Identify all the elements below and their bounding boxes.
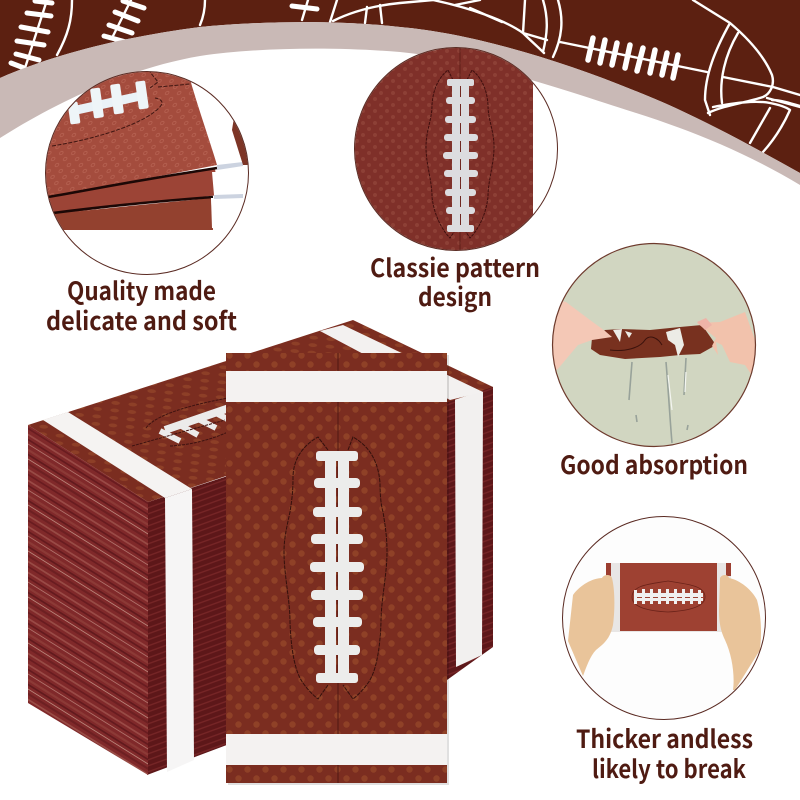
right hand <box>719 575 761 690</box>
label: classic pattern <box>370 249 540 314</box>
white band on stack side <box>165 489 194 772</box>
right side of stack <box>440 375 493 680</box>
label: quality made <box>46 272 237 338</box>
left face with paper edges <box>28 425 148 775</box>
white band on twist <box>613 328 684 357</box>
circle outline: good absorption <box>552 244 756 446</box>
stitching on held napkin <box>632 581 705 612</box>
label: thicker napkin <box>576 720 753 786</box>
stitching outline <box>426 70 494 238</box>
napkin stack product <box>28 320 493 785</box>
circle outline: classic pattern <box>354 48 558 250</box>
left hand <box>568 575 614 676</box>
lace on top face <box>132 398 233 446</box>
circle: quality made <box>46 72 248 230</box>
front napkin <box>226 353 447 783</box>
top face of stack <box>28 320 493 502</box>
label: quality made: Quality made <box>67 272 216 308</box>
front napkin shadow <box>228 355 449 785</box>
label: quality made: delicate and soft <box>46 302 237 338</box>
label: good absorption: Good absorption <box>560 446 748 482</box>
circle: thicker napkin <box>568 563 761 690</box>
twisted napkin <box>591 325 716 359</box>
third napkin sheet <box>52 198 213 230</box>
lace on sheet <box>68 80 149 125</box>
held napkin <box>606 563 731 632</box>
center fold line <box>337 353 339 783</box>
front white band on top face <box>43 412 192 498</box>
lace close-up <box>443 79 478 232</box>
label: thicker napkin: Thicker andless <box>576 720 753 756</box>
stitching outline <box>284 437 387 699</box>
left hand <box>553 302 612 370</box>
second napkin sheet <box>46 169 219 215</box>
dark gaps between sheets <box>48 168 217 197</box>
label: thicker napkin: likely to break <box>592 750 746 786</box>
label: classic pattern: design <box>418 278 492 314</box>
circle: good absorption <box>553 243 755 447</box>
stitching on sheet <box>52 72 190 146</box>
white band bottom <box>226 734 447 765</box>
top brown banner with football line art <box>0 0 800 173</box>
main lace <box>310 451 364 683</box>
back white band on top face <box>320 325 483 400</box>
circle outline: quality made <box>46 72 248 274</box>
circle: classic pattern <box>355 48 533 250</box>
top napkin sheet <box>46 72 217 198</box>
circle outline: thicker napkin <box>562 516 766 720</box>
stitch on twist <box>610 337 662 351</box>
napkin close-up <box>355 48 533 250</box>
white edges <box>211 172 219 228</box>
right hand <box>697 312 755 380</box>
white band top <box>226 371 447 402</box>
front-right side of stack <box>147 472 240 775</box>
label: classic pattern: Classie pattern <box>370 249 540 285</box>
taupe curved band <box>0 22 800 185</box>
water streams <box>629 358 688 443</box>
lace on held napkin <box>634 589 703 604</box>
